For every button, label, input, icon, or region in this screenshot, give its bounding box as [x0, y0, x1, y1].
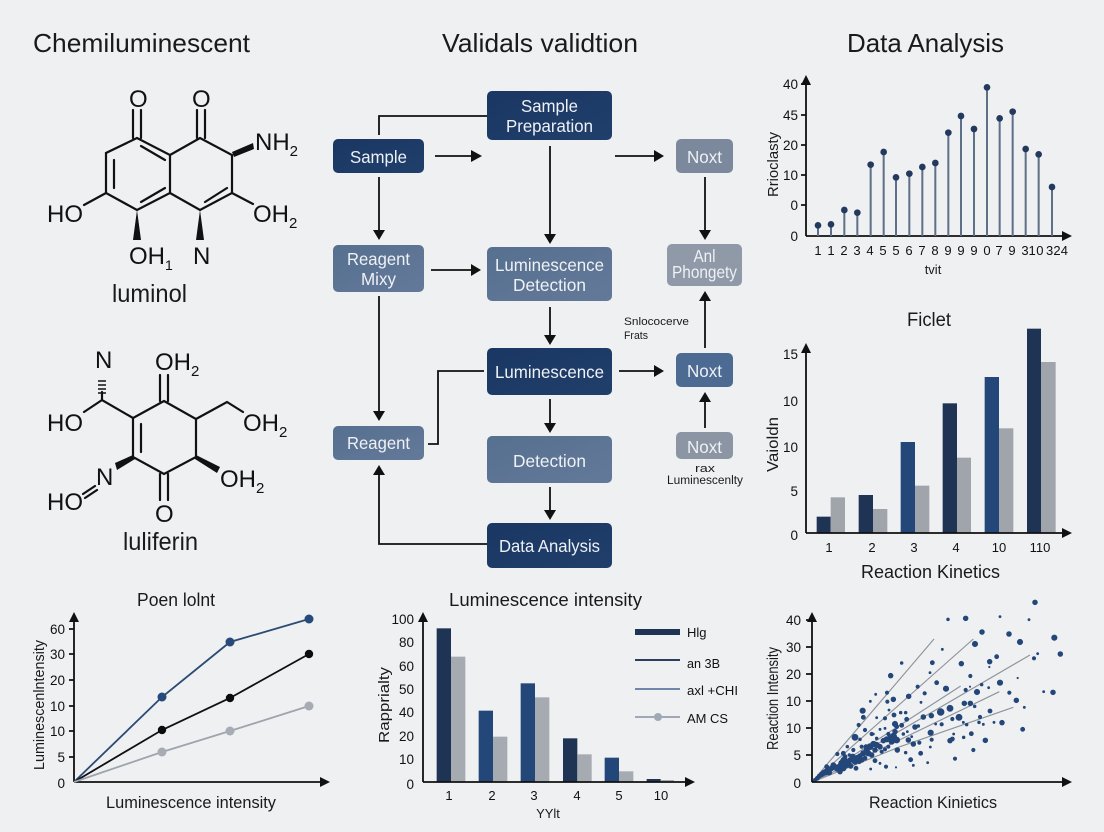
box: Luminescence Detection: Luminescence — [495, 255, 604, 275]
y labels: 5 — [57, 750, 65, 765]
y title: Rrioclasty — [765, 132, 782, 197]
x labels: 8 — [931, 243, 939, 258]
arrow: reagent mix down — [373, 296, 385, 421]
y labels: 80 — [399, 635, 414, 650]
box: Luminescence Detection: Detection — [513, 275, 586, 295]
y labels: 10 — [786, 694, 801, 709]
x labels: 7 — [995, 243, 1003, 258]
arrow: connector prep to sample — [379, 116, 487, 135]
bars — [817, 329, 1056, 533]
y labels: 40 — [399, 705, 414, 720]
box: Sample Preparation: Preparation — [506, 116, 593, 136]
arrow: next up — [699, 291, 711, 348]
x labels: 9 — [944, 243, 952, 258]
molecule: luminol: HO — [47, 201, 83, 228]
box: Data Analysis — [487, 523, 612, 568]
y labels: 60 — [399, 659, 414, 674]
x labels: 3 — [1021, 243, 1029, 258]
arrow: reagent connector to luminescence — [428, 371, 484, 444]
y labels: 0 — [406, 777, 414, 792]
x labels — [445, 788, 668, 803]
box: Sample — [333, 139, 424, 173]
box: Luminescence: Luminescence — [495, 362, 604, 382]
arrow: bottom next up — [699, 392, 711, 428]
x title: Luminescence intensity — [106, 793, 276, 812]
x labels: 9 — [1008, 243, 1016, 258]
box: Next bottom: Noxt — [687, 437, 722, 457]
y labels: 40 — [786, 613, 801, 628]
box: Sample Preparation — [487, 91, 612, 140]
chart: Luminescence intensity bars — [376, 590, 738, 821]
y labels: 5 — [790, 484, 798, 499]
x labels: 9 — [970, 243, 978, 258]
x labels: 4 — [866, 243, 874, 258]
bars — [437, 628, 674, 782]
legend — [635, 625, 738, 726]
molecule: luminol: O — [129, 86, 148, 113]
y title: Vaioldn — [765, 417, 782, 472]
y labels: 10 — [50, 699, 65, 714]
axes — [801, 343, 1072, 538]
y labels: 10 — [783, 394, 798, 409]
axes — [69, 612, 330, 787]
x labels: 4 — [952, 540, 960, 555]
arrow: detection down — [544, 487, 556, 520]
x labels: 4 — [573, 788, 581, 803]
molecule: luciferin: N — [95, 347, 112, 374]
molecule: luciferin: HO — [47, 410, 83, 437]
chart: Ficlet bars — [765, 310, 1072, 582]
x labels: 3 — [530, 788, 538, 803]
x labels: 3 — [910, 540, 918, 555]
y labels: 0 — [790, 528, 798, 543]
x labels: 3 — [853, 243, 861, 258]
x labels: 10 — [654, 788, 668, 803]
molecule: luminol: OH — [253, 201, 289, 228]
molecule: luciferin: N — [96, 464, 113, 491]
box: Reagent — [333, 426, 424, 460]
x labels: 324 — [1046, 243, 1068, 258]
y labels: 100 — [391, 612, 414, 627]
x labels: 6 — [905, 243, 913, 258]
y labels: 20 — [786, 667, 801, 682]
x labels: 2 — [488, 788, 496, 803]
molecule: luciferin: 2 — [191, 363, 199, 380]
x title: Reaction Kinietics — [869, 794, 997, 812]
series: grey — [74, 702, 314, 782]
y labels: 0 — [790, 229, 798, 244]
molecule: luminol: O — [192, 86, 211, 113]
box: Luminescence Detection — [487, 247, 612, 301]
legend: axl +CHI — [687, 683, 738, 698]
chart: stem plot — [765, 75, 1072, 277]
y labels — [783, 77, 798, 244]
x labels — [814, 243, 1068, 258]
molecule: luminol — [47, 86, 298, 273]
heading: Ficlet — [907, 310, 952, 331]
x labels: 0 — [983, 243, 991, 258]
molecule: luciferin: OH — [220, 466, 256, 493]
box: Data Analysis: Data Analysis — [499, 536, 600, 556]
molecule: luminol: NH — [255, 129, 290, 156]
x labels — [825, 540, 1050, 555]
heading: Poen lolnt — [137, 590, 215, 610]
legend: AM CS — [687, 711, 728, 726]
y labels: 10 — [783, 440, 798, 455]
y labels — [50, 622, 65, 791]
molecule: luminol: N — [193, 243, 210, 270]
x labels: 1 — [827, 243, 835, 258]
x labels: 110 — [1030, 540, 1050, 555]
molecule: luminol: 1 — [165, 257, 173, 273]
arrow: luminescence down — [544, 399, 556, 433]
annotation: Snlococerve Frats: Snlococerve — [624, 316, 689, 328]
box: Next top — [676, 139, 733, 173]
box: Next middle: Noxt — [687, 361, 722, 381]
y labels: 15 — [783, 347, 798, 362]
x title: tvit — [925, 262, 942, 277]
axes — [806, 612, 1072, 787]
x labels: 10 — [992, 540, 1006, 555]
box: Next bottom — [676, 432, 733, 459]
arrow: luminescence to next — [619, 365, 664, 377]
x labels: 5 — [892, 243, 900, 258]
y labels: 20 — [783, 138, 798, 153]
arrow: preparation down — [544, 146, 556, 244]
y labels: 60 — [50, 622, 65, 637]
x labels: 10 — [1028, 243, 1044, 258]
y labels: 20 — [399, 729, 414, 744]
y labels: 10 — [786, 721, 801, 736]
annotation: rax Luminescenlty: rax — [695, 463, 716, 475]
y labels: 50 — [399, 682, 414, 697]
box: Reagent Mixy: Mixy — [361, 269, 396, 289]
x labels: 1 — [814, 243, 822, 258]
x labels: 2 — [868, 540, 876, 555]
title: validation: Validals validtion — [442, 28, 638, 58]
y labels: 10 — [399, 752, 414, 767]
scatter points — [813, 600, 1063, 782]
molecule: luciferin: OH — [243, 410, 279, 437]
box: Detection: Detection — [513, 451, 586, 471]
box: Sample: Sample — [350, 147, 407, 167]
y labels — [783, 347, 798, 543]
box: Sample Preparation: Sample — [521, 96, 578, 116]
label: luminol: luminol — [112, 280, 187, 308]
y title: Reaction Intensity — [765, 647, 782, 750]
y labels: 30 — [50, 647, 65, 662]
x labels: 9 — [957, 243, 965, 258]
x labels: 7 — [918, 243, 926, 258]
box: Reagent Mixy — [333, 245, 424, 292]
arrow: top to next — [615, 150, 664, 162]
legend: Hlg — [687, 625, 707, 640]
y labels: 10 — [50, 724, 65, 739]
y labels — [786, 613, 801, 791]
y labels: 0 — [790, 198, 798, 213]
molecule: luciferin: 2 — [256, 480, 264, 497]
x labels: 5 — [615, 788, 623, 803]
y labels — [391, 612, 414, 792]
x title: YYlt — [536, 806, 560, 821]
molecule: luciferin: 2 — [279, 424, 287, 441]
box: Next middle — [676, 353, 733, 387]
arrow: detection down to luminescence — [544, 307, 556, 345]
title: Data Analysis: Data Analysis — [847, 28, 1004, 58]
x title: Reaction Kinetics — [861, 561, 1000, 582]
molecule: luciferin: O — [155, 501, 174, 528]
x labels: 2 — [840, 243, 848, 258]
x labels: 1 — [445, 788, 453, 803]
molecule: luciferin — [47, 347, 287, 528]
box: Anl Phongety: Anl — [694, 246, 716, 266]
box: Detection — [487, 436, 612, 483]
chart: scatter plot — [765, 600, 1072, 812]
title: Chemiluminescent: Chemiluminescent — [33, 28, 251, 58]
flowchart — [333, 91, 743, 568]
molecule: luminol: OH — [129, 243, 165, 270]
y labels: 0 — [793, 776, 801, 791]
series: blue — [74, 614, 314, 782]
box: Luminescence — [487, 348, 612, 395]
arrow: next down — [699, 177, 711, 240]
molecule: luciferin: HO — [47, 489, 83, 516]
y labels: 10 — [783, 168, 798, 183]
stems — [815, 84, 1055, 236]
y labels: 30 — [786, 640, 801, 655]
arrow: data analysis back to reagent — [373, 465, 487, 544]
axes — [801, 75, 1072, 241]
y labels: 5 — [793, 748, 801, 763]
annotation: Snlococerve Frats: Frats — [624, 330, 648, 342]
annotation: rax Luminescenlty: Luminescenlty — [667, 475, 743, 487]
heading: Luminescence intensity — [449, 590, 642, 610]
molecule: luciferin: OH — [155, 349, 191, 376]
x labels: 1 — [825, 540, 833, 555]
box: Reagent Mixy: Reagent — [347, 249, 410, 269]
box: Anl Phongety: Phongety — [672, 262, 737, 282]
y title: Luminescenlntensity — [32, 639, 48, 770]
annotation: rax Luminescenlty — [667, 463, 743, 487]
box: Next top: Noxt — [687, 147, 722, 167]
box: Anl Phongety — [667, 244, 742, 286]
arrow: sample down — [373, 177, 385, 240]
trend lines — [812, 639, 1030, 782]
x labels: 5 — [879, 243, 887, 258]
series: black — [74, 650, 313, 782]
arrow: sample to right — [435, 150, 482, 162]
annotation: Snlococerve Frats — [624, 316, 689, 342]
y title: Rapprialty — [376, 666, 393, 743]
y labels: 40 — [783, 77, 798, 92]
molecule: luminol: 2 — [289, 215, 297, 232]
legend: an 3B — [687, 656, 720, 671]
y labels: 0 — [57, 776, 65, 791]
arrow: reagent mix to detection — [431, 264, 481, 276]
label: luciferin: luliferin — [123, 528, 198, 556]
chart: line chart — [32, 590, 330, 812]
box: Reagent: Reagent — [347, 433, 410, 453]
y labels: 45 — [783, 108, 798, 123]
y labels: 20 — [50, 673, 65, 688]
molecule: luminol: 2 — [290, 143, 298, 160]
axes — [418, 612, 695, 787]
